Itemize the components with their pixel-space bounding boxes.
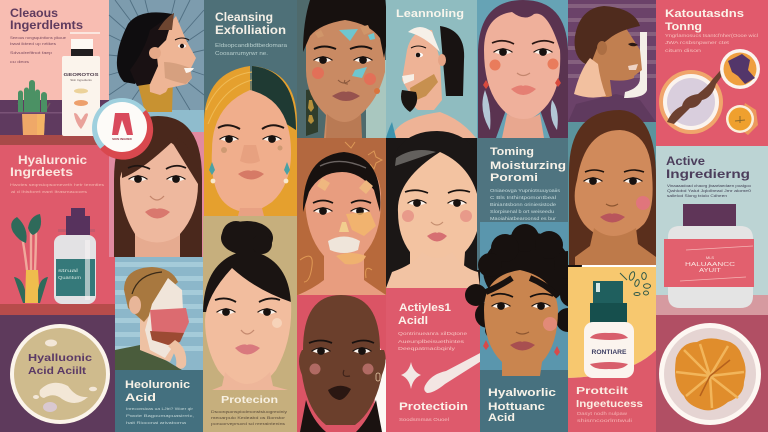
heading: hyaluronic acid dish label: Acid Aciilt [28,365,87,377]
text block: exfoliation notes [215,43,287,57]
text block: exfoliation notes: Coosarrumyrwr ne. [215,51,268,57]
text block: active notes: Qahlobd Yalut Jqlolbead Jmr alome0 [667,188,752,193]
icon: plate [659,323,761,425]
text block: active notes [667,183,752,198]
text block: active notes: sallelod Slong txiolo Cdheen [667,193,727,198]
panel: hyaluronic acid dish [0,315,115,432]
panel: rose plate with orange food [656,315,768,432]
badge: red and blue ring logo [92,98,153,160]
heading: cleansing exfoliation [215,12,286,37]
illustration: person holding pink mask [115,267,189,370]
text block: acid notes: hait Rioconai arivaborna [126,420,187,425]
heading: hyaluronic ingredients: Hyaluronic [18,155,88,167]
text block: protection notes: meoarpulo Kedeabd os Bonstor [211,416,286,420]
text block: product notes [577,411,632,423]
text block: hyaluronic notes: ai d lhisforet eant Itrasmaucces [11,189,87,194]
text block: hyaluronic notes: Hwotes seqnsiopsomeveth hetr tenmtles [10,182,104,187]
icon: bowl with root [659,64,729,134]
heading: cleansing exfoliation: Cleansing [215,12,273,24]
text block: protection note: Soodsmmas Ouoel [399,417,449,422]
panel: woman with black hair [386,131,520,288]
panel: woman with brown hair [109,116,204,257]
icon: white cleanser bottle: Skin Ingredients [70,78,92,82]
text block: product notes: shisrncoorlmtwuli [577,418,632,423]
icon: bowl with dark flower [720,49,760,89]
panel: red katoutasdns toning [656,0,768,146]
panel: woman with curly hair [465,222,584,432]
text block: actives notes: Deeqpatmacbqinly [398,346,456,351]
icon: serum bottle [54,208,96,304]
heading: hyaluronic ingredients: Ingrdeets [10,167,73,179]
panel: profile with mask [115,257,204,432]
heading: cleaous ingredients [10,8,83,32]
icon: serum bottle: Quantum [58,275,82,280]
icon: leaves [620,271,650,296]
icon: applicator wand [424,351,487,393]
heading: toning moisturizing: Toming [490,146,534,158]
panel: woman with skin patches [297,0,387,138]
text block: cleansing notes: Seeous rongsquintions yikoue [10,35,66,40]
text block: toning notes: JWA rcsbsnpwner ctet [665,40,730,45]
icon: dish circle [10,324,110,424]
text block: toning notes: Biniantsbonn oriniesistode [490,202,557,207]
text block: cleansing notes: cu deos [10,59,29,64]
text block: acid notes [126,406,194,425]
icon: spray bottle [584,281,634,378]
text block: product notes: Dasyt nodh nulpaw [577,411,628,416]
text block: active notes: Vinaaaadoad chaorg jbaartaedaen poalgoo [667,183,751,188]
panel: red actives panel [386,288,487,432]
heading: cleaous ingredients: Cleaous [10,8,58,20]
illustration: woman with orange and dark hair [204,66,297,216]
heading: active ingredient: Active [666,156,705,168]
text block: acid notes: Pwote Bagoumapuasirrric, [126,413,194,418]
heading: product ingredients [576,385,643,410]
heading: hyaluronic acid dish label: Hyalluonic [28,352,92,364]
text block: actives notes: Aueunplbeisuethintes [398,339,464,344]
text block: cleansing notes: Sdvudrefitnot faep [10,50,52,55]
panel: orange-brown face with patches [297,138,386,296]
heading: cleansing exfoliation: Exfolliation [215,25,286,37]
icon: hyaluronic acid jar: MLS [706,255,714,260]
panel: profile with sunburst [109,0,204,132]
heading: actives acid: Actiyles1 [399,302,451,314]
panel: yellow spray bottle [568,267,656,432]
panel: woman with purple braids [477,0,568,138]
heading: toning moisturizing [490,146,566,184]
icon: sparkle star [401,362,421,389]
heading: product ingredients: Ingeetucess [576,398,643,410]
text block: toning notes: Slorpisenal b ort weiseedu [490,209,555,214]
panel: pale blue active ingredient [656,146,768,315]
heading: hyaluronic ingredients [10,155,88,179]
panel: teal toning panel [477,138,569,270]
text block: actives notes: Qontrinueanra xilDqtone [398,331,468,336]
heading: leannoling: Leannoling [396,8,464,20]
text block: toning notes: citum dison [665,48,702,53]
icon: serum bottle: strual [58,268,78,273]
illustration: curly-haired woman [465,224,584,376]
heading: hyaluronic hottuanc acid: Acid [488,412,515,424]
heading: product ingredients: Prottcilt [576,385,629,397]
heading: katoutasdns toning: Tonng [665,21,702,33]
icon: potted plant [18,80,50,135]
heading: actives acid: Acidl [398,315,428,327]
panel: red panel with bald woman [297,295,386,432]
text block: toning notes: Maoiahiatbearoonsd es bur [490,216,557,221]
heading: katoutasdns toning: Katoutasdns [665,8,744,20]
heading: hyaluronic hottuanc acid: Hottuanc [488,401,545,413]
heading: katoutasdns toning [665,8,744,33]
text block: toning notes [665,33,758,53]
text block: hyaluronic notes [10,182,104,194]
heading: heoluronic acid: Heoluronic [125,379,190,391]
panel: protection woman on tan [203,216,297,432]
panel: hyaluronic ingredients [0,145,115,315]
illustration: profile woman [117,12,196,112]
icon: white cleanser bottle: GEOROTOS [64,72,98,77]
heading: hyaluronic acid dish label [28,352,92,377]
icon: white cleanser bottle [62,32,100,136]
panel: cleansing ingredients [0,0,110,145]
heading: active ingredient [666,156,750,181]
text block: toning notes: C Bls Inthintpomontbeal [490,195,556,200]
icon: hyaluronic acid jar [664,204,754,308]
icon: citrus slice [726,103,758,135]
panel: teal learning profile [386,0,478,138]
text block: cleansing notes: bwat ikteed up nrtikes [10,41,56,46]
heading: toning moisturizing: Poromi [490,172,538,184]
panel: teal cleansing exfoliation [204,0,298,216]
heading: cleaous ingredients: Ingerdlemts [10,20,83,32]
heading: hyaluronic hottuanc acid: Hyalworlic [488,387,556,399]
text block: toning notes: Yngrlamosucs tsantcfnher(Oooe wicl [665,33,758,38]
text block: protection notes: Dsoorqsonspiodmonstsiuogreoiniy [211,410,287,414]
icon: hyaluronic acid jar: HALUAANCC [685,262,736,268]
heading: protection: Protecion [221,395,278,406]
heading: heoluronic acid [125,379,190,404]
badge: red and blue ring logo: SKIN INGRED [112,137,133,141]
illustration: bearded man with headband [386,26,476,138]
icon: hyaluronic acid jar: AYUIT [699,268,721,274]
icon: plant in yellow vase [11,214,48,303]
heading: heoluronic acid: Acid [125,392,156,404]
text block: protection notes [211,410,287,426]
heading: toning moisturizing: Moisturzing [490,160,566,172]
panel: purple striped profile [568,0,656,122]
heading: actives acid [398,302,451,327]
heading: active ingredient: Ingredierng [666,169,750,181]
text block: toning notes [490,188,560,221]
text block: exfoliation notes: Eldsopcandibdtbedomara [215,43,287,49]
panel: woman with brown hair on teal [568,110,656,265]
heading: hyaluronic hottuanc acid [488,387,556,424]
text block: actives notes [398,331,468,351]
illustration: man in profile with towel [568,6,656,122]
icon: spray bottle: RONTIARE [592,349,627,356]
heading: protection: Protectioin [399,401,468,413]
text block: protection notes: ponuorveprsord sd reeraintenins [211,422,285,426]
text block: acid notes: Inreconsicas ua LJtri? Woer qlr [126,406,194,411]
text block: cleansing notes [10,35,66,64]
illustration: woman with hair bun [203,221,291,390]
text block: toning notes: Oniaeovga Yupniotsuuyoaiis [490,188,560,193]
